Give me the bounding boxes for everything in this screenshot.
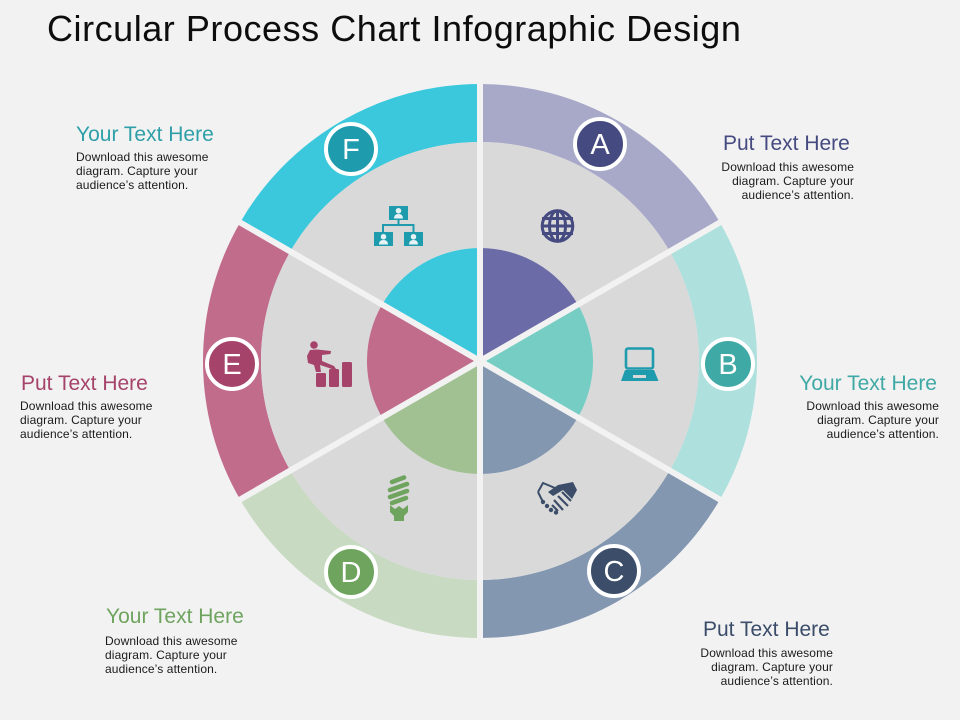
icon: handshake: [538, 482, 577, 515]
inner wedge F: [382, 248, 480, 361]
text block B: Download this awesome: [806, 399, 939, 413]
outer arc D: [240, 470, 480, 638]
icon: figure climbing bars: [307, 341, 352, 387]
text block B: audience’s attention.: [827, 427, 939, 441]
badge A: A: [590, 129, 610, 161]
badge B: [703, 339, 753, 389]
badge A: [575, 119, 625, 169]
inner wedge A: [480, 248, 578, 361]
text block E: Download this awesome: [20, 399, 153, 413]
inner wedge E: [367, 304, 480, 418]
text block A: Download this awesome: [721, 160, 854, 174]
segment B: [480, 222, 939, 500]
segment D: [105, 361, 480, 676]
outer arc B: [670, 222, 757, 500]
text block C: diagram. Capture your: [711, 660, 833, 674]
text block D: audience’s attention.: [105, 662, 217, 676]
outer arc F: [240, 84, 480, 252]
inner wedge C: [480, 361, 578, 474]
text block B: [799, 372, 939, 441]
outer arc A: [480, 84, 720, 252]
text block C: [700, 618, 833, 688]
badge F: [326, 124, 376, 174]
text block D: Your Text Here: [106, 605, 244, 628]
badge B: B: [718, 349, 738, 381]
text block A: Put Text Here: [723, 132, 850, 155]
icon: laptop: [621, 348, 658, 381]
segment A: [480, 84, 854, 361]
badge E: [207, 339, 257, 389]
text block B: Your Text Here: [799, 372, 937, 395]
text block F: [76, 123, 214, 192]
icon: light bulb: [390, 478, 408, 521]
text block A: [721, 132, 854, 202]
text block C: audience’s attention.: [721, 674, 833, 688]
inner wedge D: [382, 361, 480, 474]
title: Circular Process Chart Infographic Design: [47, 8, 741, 49]
outer arc C: [480, 470, 720, 638]
text block C: Put Text Here: [703, 618, 830, 641]
outer arc E: [203, 222, 290, 500]
text block B: diagram. Capture your: [817, 413, 939, 427]
text block D: [105, 605, 244, 676]
segment F: [76, 84, 480, 361]
text block F: audience’s attention.: [76, 178, 188, 192]
text block E: audience’s attention.: [20, 427, 132, 441]
inner wedge B: [480, 304, 593, 418]
text block D: Download this awesome: [105, 634, 238, 648]
text block E: diagram. Capture your: [20, 413, 142, 427]
badge D: [326, 547, 376, 597]
text block C: Download this awesome: [700, 646, 833, 660]
segment E: [20, 222, 480, 500]
badge C: [589, 546, 639, 596]
text block F: diagram. Capture your: [76, 164, 198, 178]
text block D: diagram. Capture your: [105, 648, 227, 662]
badge D: D: [341, 557, 361, 589]
badge C: C: [604, 556, 624, 588]
text block E: Put Text Here: [21, 372, 148, 395]
text block E: [20, 372, 153, 441]
segment C: [480, 361, 833, 688]
badge E: E: [222, 349, 242, 381]
text block F: Your Text Here: [76, 123, 214, 146]
text block F: Download this awesome: [76, 150, 209, 164]
icon: globe: [542, 210, 573, 242]
badge F: F: [342, 134, 360, 166]
text block A: diagram. Capture your: [732, 174, 854, 188]
icon: org chart: [374, 206, 423, 246]
text block A: audience’s attention.: [742, 188, 854, 202]
